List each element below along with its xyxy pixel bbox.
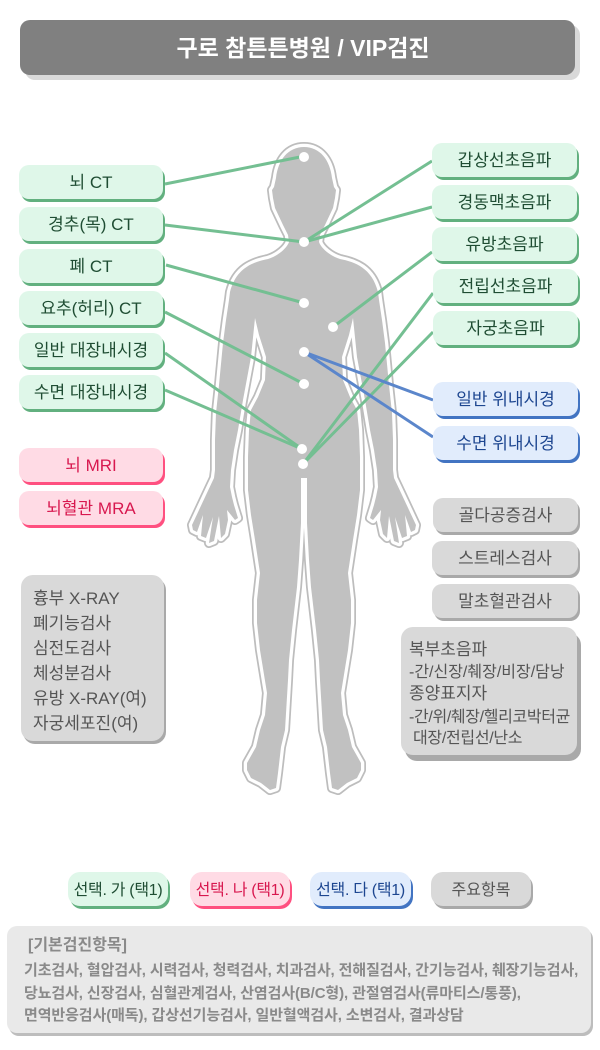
- pink option: cerebrovascular MRA: 뇌혈관 MRA: [46, 499, 136, 518]
- legend: option C: 선택. 다 (택1): [316, 882, 405, 899]
- left green option: brain CT: [19, 165, 163, 199]
- right green option: carotid ultrasound: [432, 185, 577, 219]
- main item: bone density: [433, 498, 578, 532]
- left green option: cervical CT: 경추(목) CT: [48, 215, 134, 234]
- pink option: cerebrovascular MRA: [19, 491, 163, 525]
- legend: main items: 주요항목: [452, 882, 510, 899]
- left green option: cervical CT: [19, 207, 163, 241]
- left green option: sedated colonoscopy: [19, 375, 163, 409]
- right green option: thyroid ultrasound: 갑상선초음파: [458, 151, 551, 170]
- panel: abdominal ultrasound and tumor markers: [401, 627, 577, 755]
- right green option: prostate ultrasound: 전립선초음파: [459, 277, 552, 296]
- legend: option A: [68, 872, 168, 906]
- panel: main items left: 흉부 X-RAY: [33, 589, 120, 608]
- main item: peripheral vascular test: [432, 584, 578, 618]
- blue option: sedated gastroscopy: [433, 426, 578, 460]
- right green option: breast ultrasound: [432, 227, 577, 261]
- panel: basic checkup items: 당뇨검사, 신장검사, 심혈관계검사, 산염검사(B/C형), 관절염검사(류마티스/통풍),: [24, 985, 521, 1002]
- panel: main items left: 자궁세포진(여): [33, 714, 138, 733]
- right green option: prostate ultrasound: [433, 269, 578, 303]
- pink option: brain MRI: 뇌 MRI: [65, 456, 117, 475]
- right green option: thyroid ultrasound: [432, 143, 577, 177]
- blue option: gastroscopy: 일반 위내시경: [456, 390, 555, 409]
- pink option: brain MRI: [19, 448, 163, 482]
- green connector lines: [165, 157, 433, 464]
- right green option: uterine ultrasound: [433, 311, 578, 345]
- right green option: breast ultrasound: 유방초음파: [465, 235, 544, 254]
- panel: main items left: 체성분검사: [33, 664, 111, 683]
- panel: abdominal ultrasound and tumor markers: 종양표지자: [409, 684, 487, 703]
- left green option: lung CT: [19, 249, 163, 283]
- left green option: lumbar CT: 요추(허리) CT: [40, 299, 142, 318]
- body marker dots: [297, 152, 338, 469]
- left green option: colonoscopy: [19, 333, 163, 367]
- blue option: gastroscopy: [433, 382, 578, 416]
- title banner: 구로 참튼튼병원 / VIP검진: [176, 35, 430, 61]
- panel: basic checkup items: [7, 926, 591, 1033]
- panel: main items left: 유방 X-RAY(여): [33, 689, 147, 708]
- left green option: colonoscopy: 일반 대장내시경: [34, 341, 148, 360]
- right green option: carotid ultrasound: 경동맥초음파: [458, 193, 551, 212]
- title banner: [20, 20, 575, 75]
- main item: stress test: 스트레스검사: [458, 549, 552, 568]
- panel: abdominal ultrasound and tumor markers: 대장/전립선/난소: [413, 730, 522, 747]
- legend: option C: [310, 872, 411, 906]
- legend: option B: [190, 872, 290, 906]
- main item: peripheral vascular test: 말초혈관검사: [458, 592, 552, 611]
- panel: main items left: [21, 575, 164, 741]
- panel: basic checkup items: 면역반응검사(매독), 갑상선기능검사, 일반혈액검사, 소변검사, 결과상담: [24, 1007, 464, 1024]
- blue option: sedated gastroscopy: 수면 위내시경: [456, 434, 555, 453]
- main item: bone density: 골다공증검사: [459, 506, 552, 525]
- left green option: lung CT: 폐 CT: [69, 257, 113, 276]
- main item: stress test: [432, 541, 578, 575]
- blue connector lines: [304, 352, 433, 437]
- left green option: brain CT: 뇌 CT: [69, 173, 113, 192]
- right green option: uterine ultrasound: 자궁초음파: [466, 319, 545, 338]
- panel: abdominal ultrasound and tumor markers: 복부초음파: [409, 640, 487, 659]
- panel: basic checkup items: 기초검사, 혈압검사, 시력검사, 청력검사, 치과검사, 전해질검사, 간기능검사, 췌장기능검사,: [24, 962, 578, 979]
- legend: main items: [431, 872, 531, 906]
- panel: main items left: 심전도검사: [33, 639, 111, 658]
- legend: option A: 선택. 가 (택1): [74, 882, 162, 899]
- panel: main items left: 폐기능검사: [33, 614, 111, 633]
- legend: option B: 선택. 나 (택1): [196, 882, 284, 899]
- panel: abdominal ultrasound and tumor markers: -간/신장/췌장/비장/담낭: [409, 664, 565, 681]
- panel: abdominal ultrasound and tumor markers: -간/위/췌장/헬리코박터균: [409, 709, 570, 726]
- left green option: sedated colonoscopy: 수면 대장내시경: [34, 383, 148, 402]
- left green option: lumbar CT: [19, 291, 163, 325]
- panel: basic checkup items: [기본검진항목]: [28, 937, 127, 954]
